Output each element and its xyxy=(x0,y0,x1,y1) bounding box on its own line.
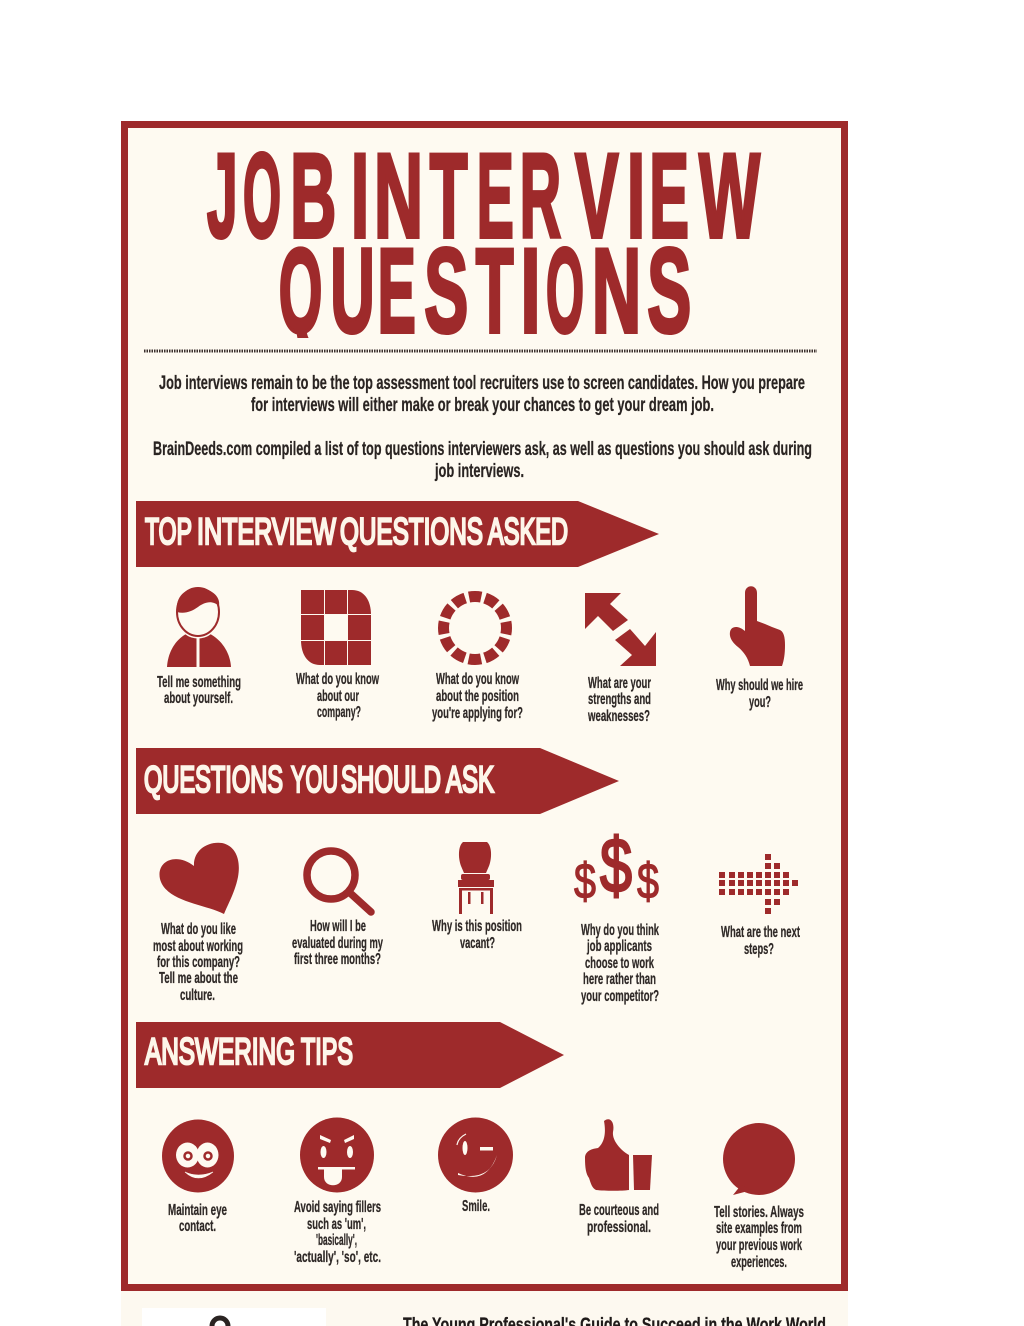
title: E xyxy=(649,129,689,263)
caption: avoid fillers: 'actually', 'so', etc. xyxy=(294,1249,381,1266)
title: I xyxy=(351,129,369,263)
caption: eye contact: contact. xyxy=(179,1218,216,1235)
title: I xyxy=(520,224,540,358)
title: T xyxy=(430,129,468,263)
icon: company grid xyxy=(301,590,371,665)
caption: know about position: about the position xyxy=(436,688,519,705)
caption: tell me something: about yourself. xyxy=(164,690,233,707)
caption: tell stories: site examples from xyxy=(716,1220,802,1237)
caption: courteous: Be courteous and xyxy=(579,1202,659,1219)
title: W xyxy=(699,129,760,263)
caption: how evaluated xyxy=(292,918,383,968)
intro text: job interviews. xyxy=(434,460,524,482)
caption: know about company xyxy=(296,671,380,721)
caption: know about position xyxy=(432,671,523,722)
caption: tell me something xyxy=(157,674,241,707)
title: E xyxy=(477,129,514,263)
icon: heart xyxy=(159,843,239,914)
caption: smile: Smile. xyxy=(462,1198,490,1215)
icon: eye contact face xyxy=(162,1120,234,1192)
banner: top interview questions asked: TOP xyxy=(145,511,192,552)
icon: tongue out face xyxy=(300,1118,374,1192)
caption: tell stories: Tell stories. Always xyxy=(714,1204,804,1221)
caption: next steps xyxy=(721,924,800,958)
banner: top interview questions asked xyxy=(136,501,659,567)
title: R xyxy=(520,129,561,263)
caption: why hire: Why should we hire xyxy=(716,677,803,694)
icon: chair xyxy=(458,842,494,914)
banner: answering tips: TIPS xyxy=(301,1031,353,1072)
caption: why applicants choose: job applicants xyxy=(586,938,652,955)
title: I xyxy=(627,129,645,263)
banner: questions you should ask: ASK xyxy=(446,759,494,800)
title: E xyxy=(378,224,416,358)
caption: eye contact xyxy=(168,1202,227,1235)
intro text xyxy=(153,372,812,482)
title: S xyxy=(424,224,468,358)
caption: next steps: What are the next xyxy=(721,924,800,941)
caption: what do you like: most about working xyxy=(153,938,243,955)
caption: why hire xyxy=(716,677,803,711)
caption: know about company: company? xyxy=(317,704,361,721)
icon: dollar signs: $ xyxy=(574,853,596,909)
title: O xyxy=(546,224,584,358)
caption: strengths and weaknesses xyxy=(587,675,651,725)
icon: thumbs up xyxy=(585,1119,652,1191)
caption: what do you like: Tell me about the xyxy=(159,970,238,987)
caption: avoid fillers: such as 'um', xyxy=(307,1216,366,1233)
banner: questions you should ask: QUESTIONS xyxy=(144,759,283,800)
banner: questions you should ask xyxy=(136,748,619,814)
banner: answering tips xyxy=(136,1022,564,1088)
caption: courteous: professional. xyxy=(587,1219,651,1236)
banner: questions you should ask: SHOULD xyxy=(341,759,441,800)
caption: strengths and weaknesses: What are your xyxy=(588,675,651,692)
caption: what do you like xyxy=(153,921,243,1004)
icon: dollar signs xyxy=(574,823,659,909)
caption: know about company: What do you know xyxy=(296,671,380,688)
banner: answering tips: ANSWERING xyxy=(145,1031,295,1072)
caption: why vacant xyxy=(432,918,522,952)
icon: speech bubble xyxy=(723,1123,795,1195)
caption: tell me something: Tell me something xyxy=(157,674,241,691)
caption: how evaluated: first three months? xyxy=(294,951,381,968)
caption: know about position: What do you know xyxy=(436,671,520,688)
caption: why applicants choose: your competitor? xyxy=(581,988,659,1005)
caption: next steps: steps? xyxy=(744,941,774,958)
intro text: for interviews will either make or break your chances to get your dream job. xyxy=(251,394,714,416)
icon: dollar signs: $ xyxy=(600,823,632,909)
caption: know about position: you're applying for? xyxy=(432,705,523,722)
caption: how evaluated: evaluated during my xyxy=(292,935,383,952)
caption: tell stories: experiences. xyxy=(731,1254,787,1271)
icon: pointing hand xyxy=(730,586,785,666)
title xyxy=(206,151,762,338)
caption: eye contact: Maintain eye xyxy=(168,1202,227,1219)
caption: tell stories: your previous work xyxy=(716,1237,802,1254)
icon: person xyxy=(167,588,231,667)
title: V xyxy=(575,129,618,263)
icon: segmented ring xyxy=(444,596,506,660)
caption: avoid fillers: 'basically', xyxy=(316,1232,357,1249)
banner: top interview questions asked: QUESTIONS xyxy=(340,511,483,552)
poster frame panel xyxy=(124,124,844,1288)
caption: why hire: you? xyxy=(749,694,771,711)
caption: why applicants choose: Why do you think xyxy=(581,922,659,939)
title: T xyxy=(476,224,514,358)
caption: what do you like: culture. xyxy=(180,987,215,1004)
caption: tell stories xyxy=(714,1204,804,1271)
caption: why vacant: Why is this position xyxy=(432,918,522,935)
icon: dotted arrow xyxy=(719,854,798,914)
caption: strengths and weaknesses: weaknesses? xyxy=(587,708,650,725)
caption: what do you like: What do you like xyxy=(161,921,236,938)
icon: dollar signs: $ xyxy=(637,853,659,909)
caption: how evaluated: How will I be xyxy=(310,918,366,935)
title: S xyxy=(647,224,691,358)
title: J xyxy=(207,129,238,263)
icon: magnifying glass xyxy=(307,851,371,912)
title: N xyxy=(374,129,423,263)
banner: questions you should ask: YOU xyxy=(291,759,338,800)
caption: what do you like: for this company? xyxy=(157,954,240,971)
caption: why applicants choose: here rather than xyxy=(583,971,656,988)
caption: why vacant: vacant? xyxy=(460,935,495,952)
caption: avoid fillers: Avoid saying fillers xyxy=(294,1199,381,1216)
icon: winking face xyxy=(438,1118,513,1192)
caption: courteous xyxy=(579,1202,659,1236)
icon: diagonal arrows xyxy=(585,593,656,666)
caption: know about company: about our xyxy=(317,688,359,705)
title: Q xyxy=(279,224,322,358)
title: B xyxy=(290,129,336,263)
banner: top interview questions asked: ASKED xyxy=(488,511,568,552)
caption: why applicants choose: choose to work xyxy=(585,955,654,972)
footer logo xyxy=(142,1308,326,1326)
title: U xyxy=(330,224,375,358)
caption: avoid fillers xyxy=(294,1199,381,1266)
banner: top interview questions asked: INTERVIEW xyxy=(197,511,336,552)
title: N xyxy=(592,224,641,358)
caption: why applicants choose xyxy=(581,922,659,1005)
title: O xyxy=(243,129,281,263)
caption: strengths and weaknesses: strengths and xyxy=(588,691,651,708)
